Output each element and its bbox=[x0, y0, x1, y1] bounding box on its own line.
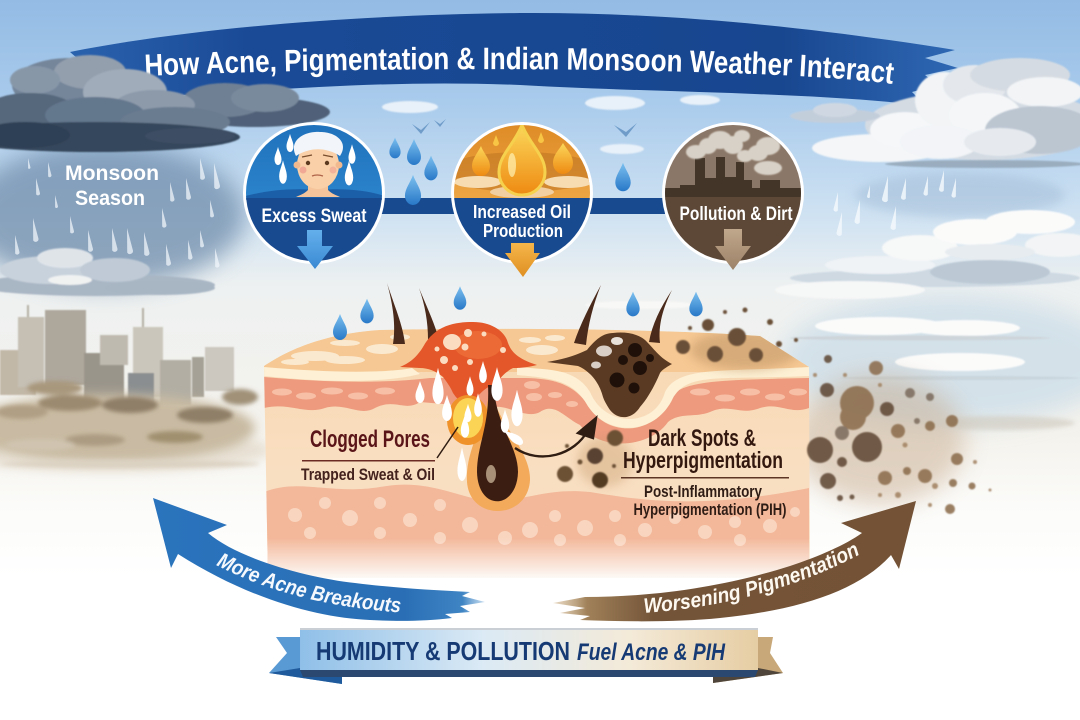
city skyline bbox=[0, 305, 234, 405]
low clouds left bbox=[0, 248, 215, 296]
ribbon text: Fuel Acne & PIH bbox=[577, 639, 726, 666]
label: monsoon season bbox=[65, 162, 159, 210]
label: increased oil production bbox=[473, 202, 571, 241]
upper right cloud bank bbox=[790, 58, 1080, 168]
arrow: clogged to dark bbox=[515, 418, 596, 456]
label: increased oil production: Production bbox=[483, 221, 563, 241]
pigment spots in dermis bbox=[557, 430, 623, 488]
hair follicles bbox=[387, 283, 672, 345]
panel: increased oil bbox=[451, 122, 593, 277]
arrow: oil down bbox=[505, 243, 540, 277]
sweat droplets white bbox=[415, 361, 525, 481]
label: more acne breakouts: More Acne Breakouts bbox=[216, 553, 400, 612]
lower right clouds bbox=[585, 210, 1080, 380]
label: clogged pores: Clogged Pores bbox=[310, 426, 430, 453]
arrow: pollution down bbox=[715, 229, 751, 270]
label: worsening pigmentation: Worsening Pigmentation bbox=[644, 545, 859, 613]
storm cloud bbox=[0, 55, 330, 152]
pink band bbox=[264, 377, 809, 443]
arrow: worsening pigmentation bbox=[554, 501, 916, 622]
clogged pore core bbox=[447, 385, 530, 511]
panel: skin cross-section bbox=[255, 283, 825, 580]
label: increased oil production: Increased Oil bbox=[473, 202, 571, 222]
water drops above skin bbox=[333, 286, 703, 340]
tree band bbox=[0, 381, 260, 468]
label: dark spots and hyperpigmentation bbox=[621, 425, 789, 519]
panel: pollution bbox=[660, 120, 810, 270]
rain drops left bbox=[15, 158, 220, 268]
label: excess sweat: Excess Sweat bbox=[262, 206, 367, 227]
label: clogged pores: Trapped Sweat & Oil bbox=[301, 465, 435, 484]
small clouds center bbox=[382, 95, 720, 154]
connector bar bbox=[380, 198, 665, 214]
ribbon text: HUMIDITY & POLLUTION bbox=[316, 636, 570, 666]
acne bump bbox=[400, 322, 537, 403]
title text: How Acne, Pigmentation & Indian Monsoon Weather Interact bbox=[146, 46, 894, 84]
label: dark spots and hyperpigmentation: Dark Spots & bbox=[648, 425, 756, 452]
icon: factory with smoke bbox=[665, 130, 803, 197]
surface layer bbox=[264, 329, 809, 372]
dirt haze on right bbox=[795, 375, 1075, 505]
label: monsoon season: Monsoon bbox=[65, 162, 159, 185]
bottom ribbon bbox=[269, 628, 783, 684]
title banner bbox=[70, 13, 958, 102]
label: monsoon season: Season bbox=[75, 187, 145, 210]
label: dark spots and hyperpigmentation: Post-Inflammatory bbox=[644, 483, 763, 501]
icon: oil drops bbox=[472, 125, 573, 195]
label: dark spots and hyperpigmentation: Hyperpigmentation (PIH) bbox=[634, 501, 786, 519]
label: dark spots and hyperpigmentation: Hyperpigmentation bbox=[623, 447, 783, 473]
cream band bbox=[264, 367, 809, 428]
label: clogged pores bbox=[301, 426, 458, 484]
haze: rain and right horizon bbox=[0, 143, 1080, 472]
hyperpigmented bump bbox=[547, 333, 672, 417]
label: pollution and dirt: Pollution & Dirt bbox=[680, 204, 793, 225]
rain drops right bbox=[833, 170, 1065, 236]
arrow: sweat down bbox=[297, 230, 333, 269]
dermis bbox=[266, 484, 809, 570]
dirt particle splatter bbox=[807, 355, 992, 514]
surface pigment spots bbox=[676, 308, 798, 362]
floating water drops and birds bbox=[389, 119, 637, 205]
arrow: more acne breakouts bbox=[153, 498, 484, 621]
panel: excess sweat bbox=[240, 120, 390, 269]
icon: worried person bbox=[294, 132, 343, 197]
pigment stain bbox=[690, 330, 800, 370]
